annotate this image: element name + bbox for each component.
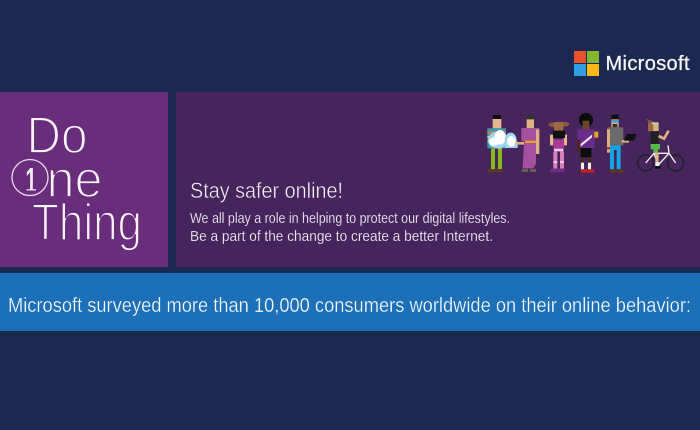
figure: man with afro bbox=[577, 113, 598, 173]
Microsoft logo: Microsoft bbox=[606, 53, 690, 75]
panel: message bbox=[176, 92, 700, 267]
panel: Do One Thing logo: Thing bbox=[32, 194, 142, 252]
figure: man with laptop bbox=[607, 115, 637, 173]
figure: girl with tablet bbox=[548, 122, 569, 172]
figure: woman in purple dress bbox=[515, 115, 539, 172]
icon: cloud bbox=[488, 130, 518, 149]
heading: Stay safer online! bbox=[190, 178, 343, 203]
icon: circled numeral one: 1 bbox=[26, 160, 36, 201]
Microsoft logo bbox=[574, 51, 690, 76]
panel: Do One Thing logo bbox=[0, 92, 168, 267]
text block bbox=[190, 211, 510, 245]
text block: Be a part of the change to create a better Internet. bbox=[190, 229, 493, 245]
figure: cyclist bbox=[638, 119, 684, 171]
illustration: six pixel people bbox=[487, 113, 684, 173]
figure: woman in striped top with cloud bbox=[487, 115, 518, 172]
icon: circled numeral one bbox=[12, 160, 48, 201]
panel: Do One Thing logo: Do bbox=[26, 107, 88, 165]
banner: survey statement bbox=[0, 273, 700, 331]
panel: Do One Thing logo: ne bbox=[46, 151, 102, 209]
text block: We all play a role in helping to protect our digital lifestyles. bbox=[190, 211, 510, 227]
infographic canvas bbox=[0, 51, 700, 331]
